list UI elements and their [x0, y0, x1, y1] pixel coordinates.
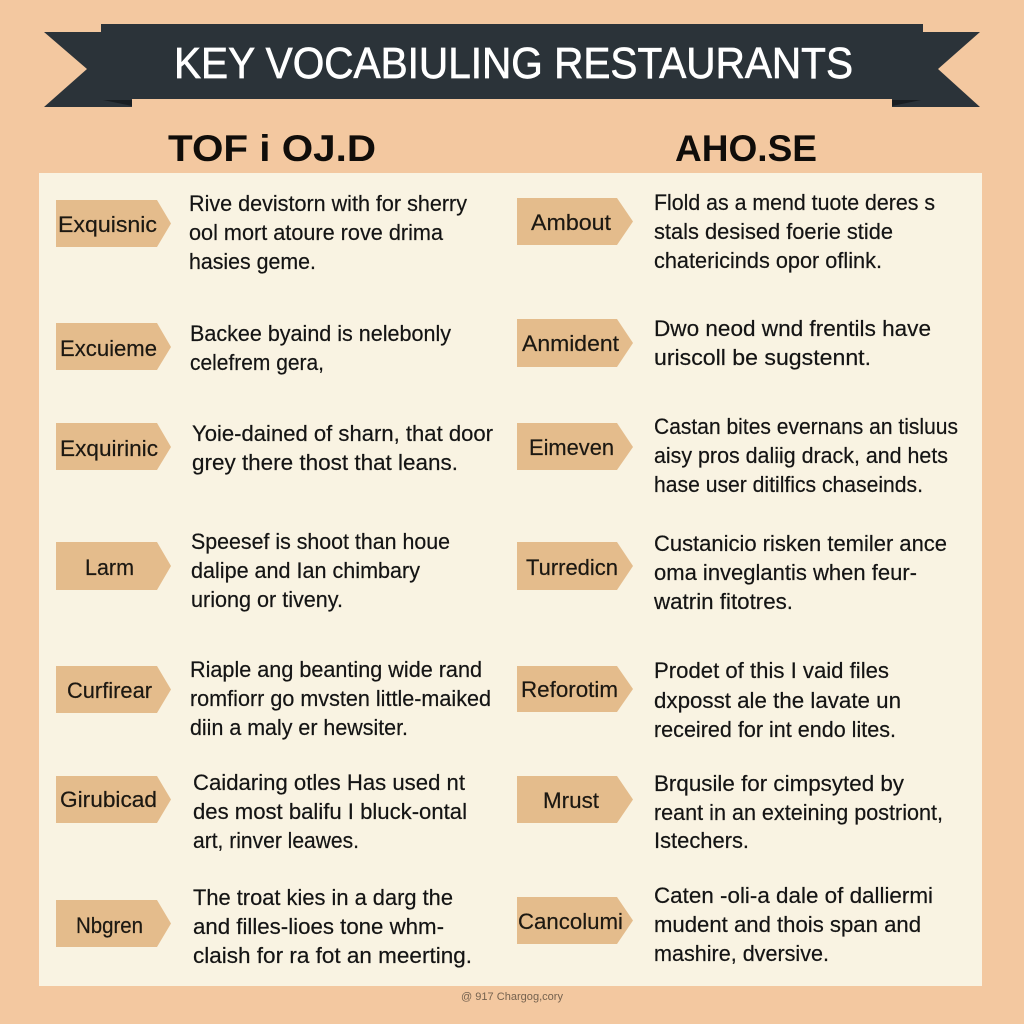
row: Anmident: uriscoll be sugstennt. — [654, 345, 871, 370]
row: Reforotim: Reforotim — [521, 677, 618, 702]
row: Excuieme: celefrem gera, — [190, 350, 324, 375]
row: Exquisnic: Rive devistorn with for sherry — [189, 191, 467, 216]
row: Exquisnic — [56, 191, 467, 274]
row: Ambout — [517, 190, 935, 273]
row: Nbgren: The troat kies in a darg the — [193, 885, 453, 910]
row: Eimeven: aisy pros daliig drack, and hets — [654, 443, 948, 468]
row: Girubicad: Girubicad — [60, 787, 157, 812]
row: Cancolumi: Caten -oli-a dale of dalliermi — [654, 883, 933, 908]
row: Reforotim: Prodet of this I vaid files — [654, 658, 889, 683]
row: Excuieme: Backee byaind is nelebonly — [190, 321, 451, 346]
right column heading: AHO.SE — [675, 128, 817, 169]
footer credit: @ 917 Chargog,cory — [461, 991, 563, 1003]
row: Cancolumi: mudent and thois span and — [654, 912, 921, 937]
row: Girubicad — [56, 770, 467, 853]
row: Turredicn — [517, 531, 947, 614]
row: Ambout: stals desised foerie stide — [654, 219, 893, 244]
row: Anmident — [517, 316, 931, 370]
row: Eimeven: hase user ditilfics chaseinds. — [654, 472, 923, 497]
row: Exquirinic: Yoie-dained of sharn, that door — [192, 421, 493, 446]
row: Nbgren: claish for ra fot an meerting. — [193, 943, 472, 968]
panel: vocabulary table — [39, 173, 982, 986]
row: Larm: Larm — [85, 555, 134, 580]
row: Exquirinic — [56, 421, 493, 475]
row: Curfirear: diin a maly er hewsiter. — [190, 715, 408, 740]
row: Reforotim: receired for int endo lites. — [654, 717, 896, 742]
row: Turredicn: Turredicn — [526, 555, 618, 580]
row: Mrust: Brqusile for cimpsyted by — [654, 771, 904, 796]
row: Eimeven: Castan bites evernans an tisluus — [654, 414, 958, 439]
row: Mrust: Istechers. — [654, 828, 749, 853]
row: Turredicn: Custanicio risken temiler ance — [654, 531, 947, 556]
row: Exquisnic: ool mort atoure rove drima — [189, 220, 444, 245]
row: Girubicad: Caidaring otles Has used nt — [193, 770, 465, 795]
row: Girubicad: des most balifu I bluck-ontal — [193, 799, 467, 824]
row: Turredicn: watrin fitotres. — [653, 589, 793, 614]
row: Curfirear — [56, 657, 491, 740]
row: Cancolumi — [517, 883, 933, 966]
row: Anmident: Anmident — [522, 331, 619, 356]
row: Cancolumi: mashire, dversive. — [654, 941, 829, 966]
row: Reforotim: dxposst ale the lavate un — [654, 688, 901, 713]
row: Curfirear: romfiorr go mvsten little-maiked — [190, 686, 491, 711]
row: Mrust: reant in an exteining postriont, — [654, 800, 943, 825]
row: Cancolumi: Cancolumi — [518, 909, 623, 934]
row: Exquisnic: Exquisnic — [58, 212, 157, 237]
row: Turredicn: oma inveglantis when feur- — [654, 560, 917, 585]
left column heading: TOF i OJ.D — [168, 128, 376, 169]
row: Mrust — [517, 771, 943, 853]
row: Curfirear: Riaple ang beanting wide rand — [190, 657, 482, 682]
row: Anmident: Dwo neod wnd frentils have — [654, 316, 931, 341]
row: Curfirear: Curfirear — [67, 678, 152, 703]
row: Girubicad: art, rinver leawes. — [193, 828, 359, 853]
row: Nbgren: and filles-lioes tone whm- — [193, 914, 444, 939]
row: Ambout: chatericinds opor oflink. — [654, 248, 882, 273]
title banner — [44, 24, 980, 107]
row: Larm — [56, 529, 450, 612]
row: Larm: uriong or tiveny. — [191, 587, 343, 612]
row: Excuieme: Excuieme — [60, 336, 157, 361]
row: Larm: dalipe and Ian chimbary — [191, 558, 420, 583]
row: Nbgren — [56, 885, 472, 968]
row: Eimeven: Eimeven — [529, 435, 614, 460]
row: Eimeven — [517, 414, 958, 497]
title: KEY VOCABIULING RESTAURANTS — [174, 39, 853, 88]
row: Ambout: Ambout — [531, 210, 611, 235]
row: Nbgren: Nbgren — [76, 913, 143, 938]
row: Exquirinic: Exquirinic — [60, 436, 158, 461]
row: Mrust: Mrust — [543, 788, 599, 813]
row: Reforotim — [517, 658, 901, 742]
row: Excuieme — [56, 321, 451, 375]
row: Ambout: Flold as a mend tuote deres s — [654, 190, 935, 215]
row: Exquisnic: hasies geme. — [189, 249, 316, 274]
row: Exquirinic: grey there thost that leans. — [192, 450, 458, 475]
row: Larm: Speesef is shoot than houe — [191, 529, 450, 554]
